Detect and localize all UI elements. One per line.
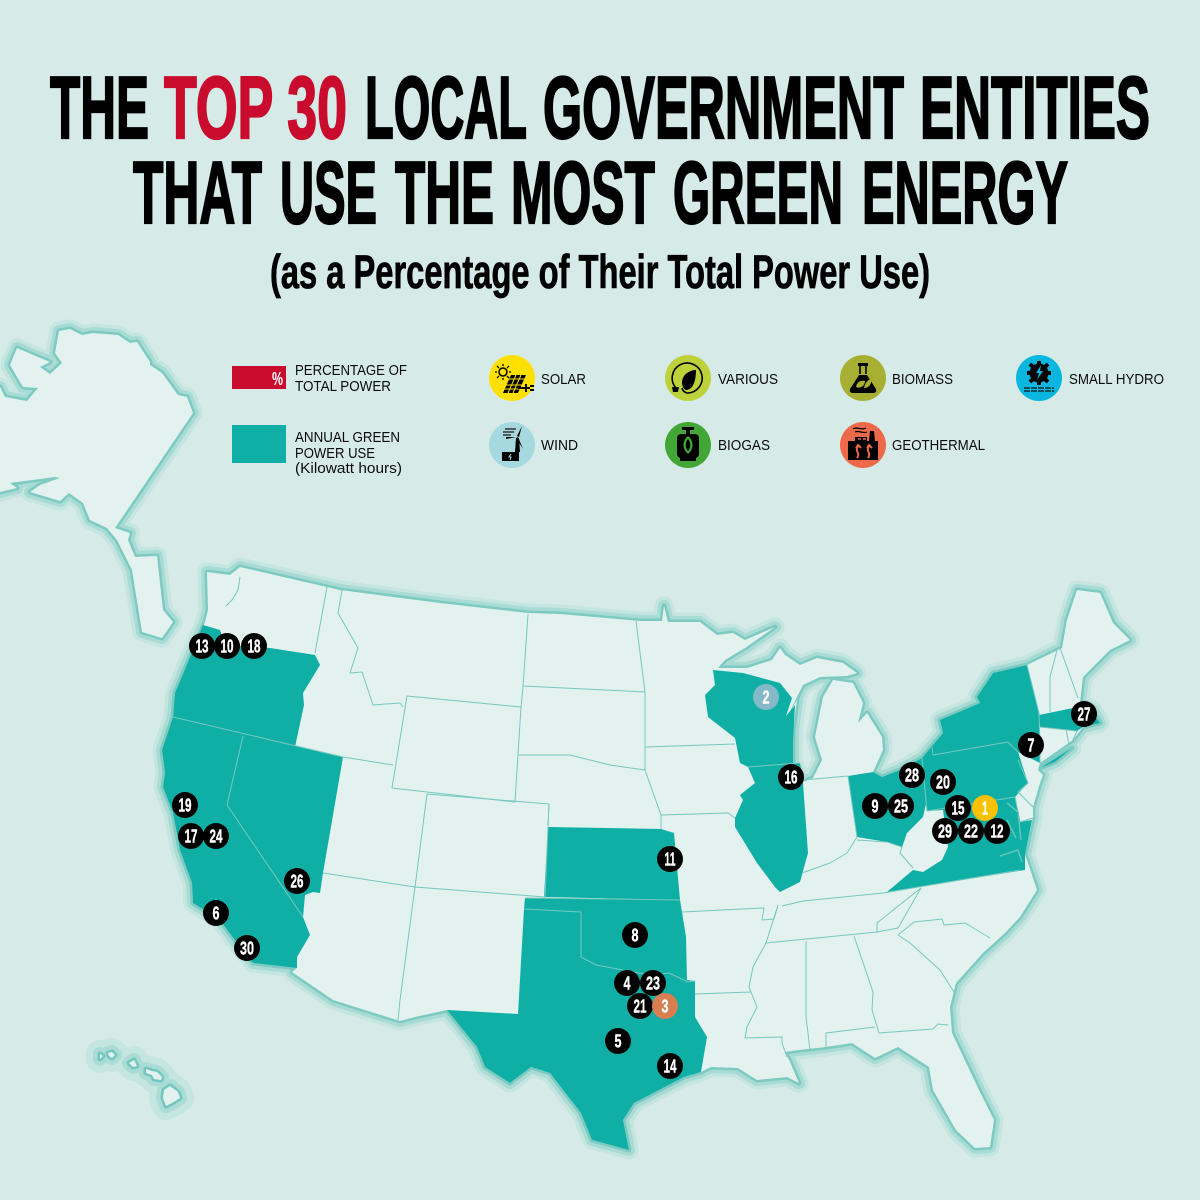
marker 25 <box>888 793 914 819</box>
marker 16 <box>778 764 804 790</box>
title: GOVERNMENT <box>543 58 904 157</box>
marker 22 <box>958 818 984 844</box>
numbered location markers <box>172 633 1097 1079</box>
legend: percentage of total power <box>232 363 407 395</box>
marker 21: 21 <box>634 996 646 1016</box>
marker 9: 9 <box>872 796 878 816</box>
marker 7: 7 <box>1028 736 1034 756</box>
marker 24 <box>203 823 229 849</box>
marker 28: 28 <box>905 766 919 786</box>
marker 26 <box>284 868 310 894</box>
title: THE <box>395 143 494 242</box>
marker 17 <box>178 823 204 849</box>
marker 25: 25 <box>894 796 908 816</box>
marker 13 <box>189 633 215 659</box>
marker 5 <box>605 1028 631 1054</box>
legend: wind <box>489 422 578 468</box>
marker 18: 18 <box>248 636 260 656</box>
marker 16: 16 <box>784 768 798 788</box>
marker 3 <box>652 993 678 1019</box>
marker 30: 30 <box>240 938 254 958</box>
legend: annual green power use: POWER USE <box>295 446 375 462</box>
marker 24: 24 <box>210 826 222 846</box>
marker 15 <box>945 795 971 821</box>
legend: percentage of total power: PERCENTAGE OF <box>295 363 407 379</box>
coast glow <box>0 329 1130 1150</box>
legend: biomass <box>840 355 953 401</box>
marker 23 <box>640 970 666 996</box>
legend: solar <box>489 355 586 401</box>
marker 2: 2 <box>762 688 770 708</box>
marker 3: 3 <box>662 996 668 1016</box>
marker 10: 10 <box>220 636 234 656</box>
legend: small hydro <box>1016 355 1164 401</box>
legend: biogas: BIOGAS <box>718 438 770 454</box>
marker 4: 4 <box>624 974 630 994</box>
marker 2 <box>753 684 779 710</box>
marker 15: 15 <box>952 798 964 818</box>
marker 19: 19 <box>178 796 192 816</box>
legend: geothermal <box>840 422 985 468</box>
marker 20: 20 <box>936 772 950 792</box>
marker 27 <box>1071 701 1097 727</box>
legend: annual green power use: ANNUAL GREEN <box>295 430 400 446</box>
title: GREEN <box>673 143 843 242</box>
land <box>0 329 1130 1150</box>
marker 18 <box>241 633 267 659</box>
title: MOST <box>511 143 655 242</box>
marker 17: 17 <box>184 826 198 846</box>
marker 19 <box>172 792 198 818</box>
marker 27: 27 <box>1078 704 1090 724</box>
marker 13: 13 <box>196 636 208 656</box>
marker 1 <box>972 795 998 821</box>
title: USE <box>280 143 377 242</box>
marker 20 <box>930 769 956 795</box>
legend: percentage of total power: TOTAL POWER <box>295 379 391 395</box>
subtitle: (as a Percentage of Their Total Power Use) <box>270 245 930 298</box>
legend: biogas <box>665 422 770 468</box>
marker 11 <box>657 846 683 872</box>
marker 6 <box>203 900 229 926</box>
legend <box>232 355 1164 477</box>
legend: biomass: BIOMASS <box>892 372 953 388</box>
marker 7 <box>1018 732 1044 758</box>
marker 21 <box>627 993 653 1019</box>
marker 14 <box>657 1053 683 1079</box>
marker 28 <box>899 762 925 788</box>
state borders <box>173 577 1078 1057</box>
marker 12 <box>984 818 1010 844</box>
marker 4 <box>614 970 640 996</box>
legend: small hydro: SMALL HYDRO <box>1069 372 1164 388</box>
marker 8 <box>622 922 648 948</box>
Chesapeake Bay inlets <box>1000 803 1022 862</box>
marker 11: 11 <box>664 850 676 870</box>
map of the United States <box>0 329 1130 1150</box>
legend: annual green power use: (Kilowatt hours) <box>295 461 402 477</box>
legend: percentage of total power: % <box>272 369 283 389</box>
title <box>50 58 1150 242</box>
marker 22: 22 <box>964 822 978 842</box>
legend: wind: WIND <box>541 438 578 454</box>
marker 8: 8 <box>632 926 638 946</box>
title: TOP 30 <box>164 58 347 157</box>
title: THE <box>50 58 149 157</box>
legend: solar: SOLAR <box>541 372 586 388</box>
marker 1: 1 <box>982 798 988 818</box>
marker 29 <box>932 818 958 844</box>
highlighted states <box>162 625 1100 1150</box>
title: LOCAL <box>365 58 527 157</box>
marker 23: 23 <box>646 974 660 994</box>
marker 5: 5 <box>614 1032 622 1052</box>
marker 29: 29 <box>938 822 952 842</box>
marker 12: 12 <box>990 822 1004 842</box>
title: THAT <box>133 143 262 242</box>
legend: various <box>665 355 778 401</box>
marker 14: 14 <box>664 1056 676 1076</box>
legend: annual green power use <box>232 425 402 477</box>
legend: geothermal: GEOTHERMAL <box>892 438 985 454</box>
marker 9 <box>862 793 888 819</box>
marker 10 <box>214 633 240 659</box>
marker 30 <box>234 935 260 961</box>
marker 26: 26 <box>290 872 304 892</box>
legend: various: VARIOUS <box>718 372 778 388</box>
marker 6: 6 <box>212 904 220 924</box>
